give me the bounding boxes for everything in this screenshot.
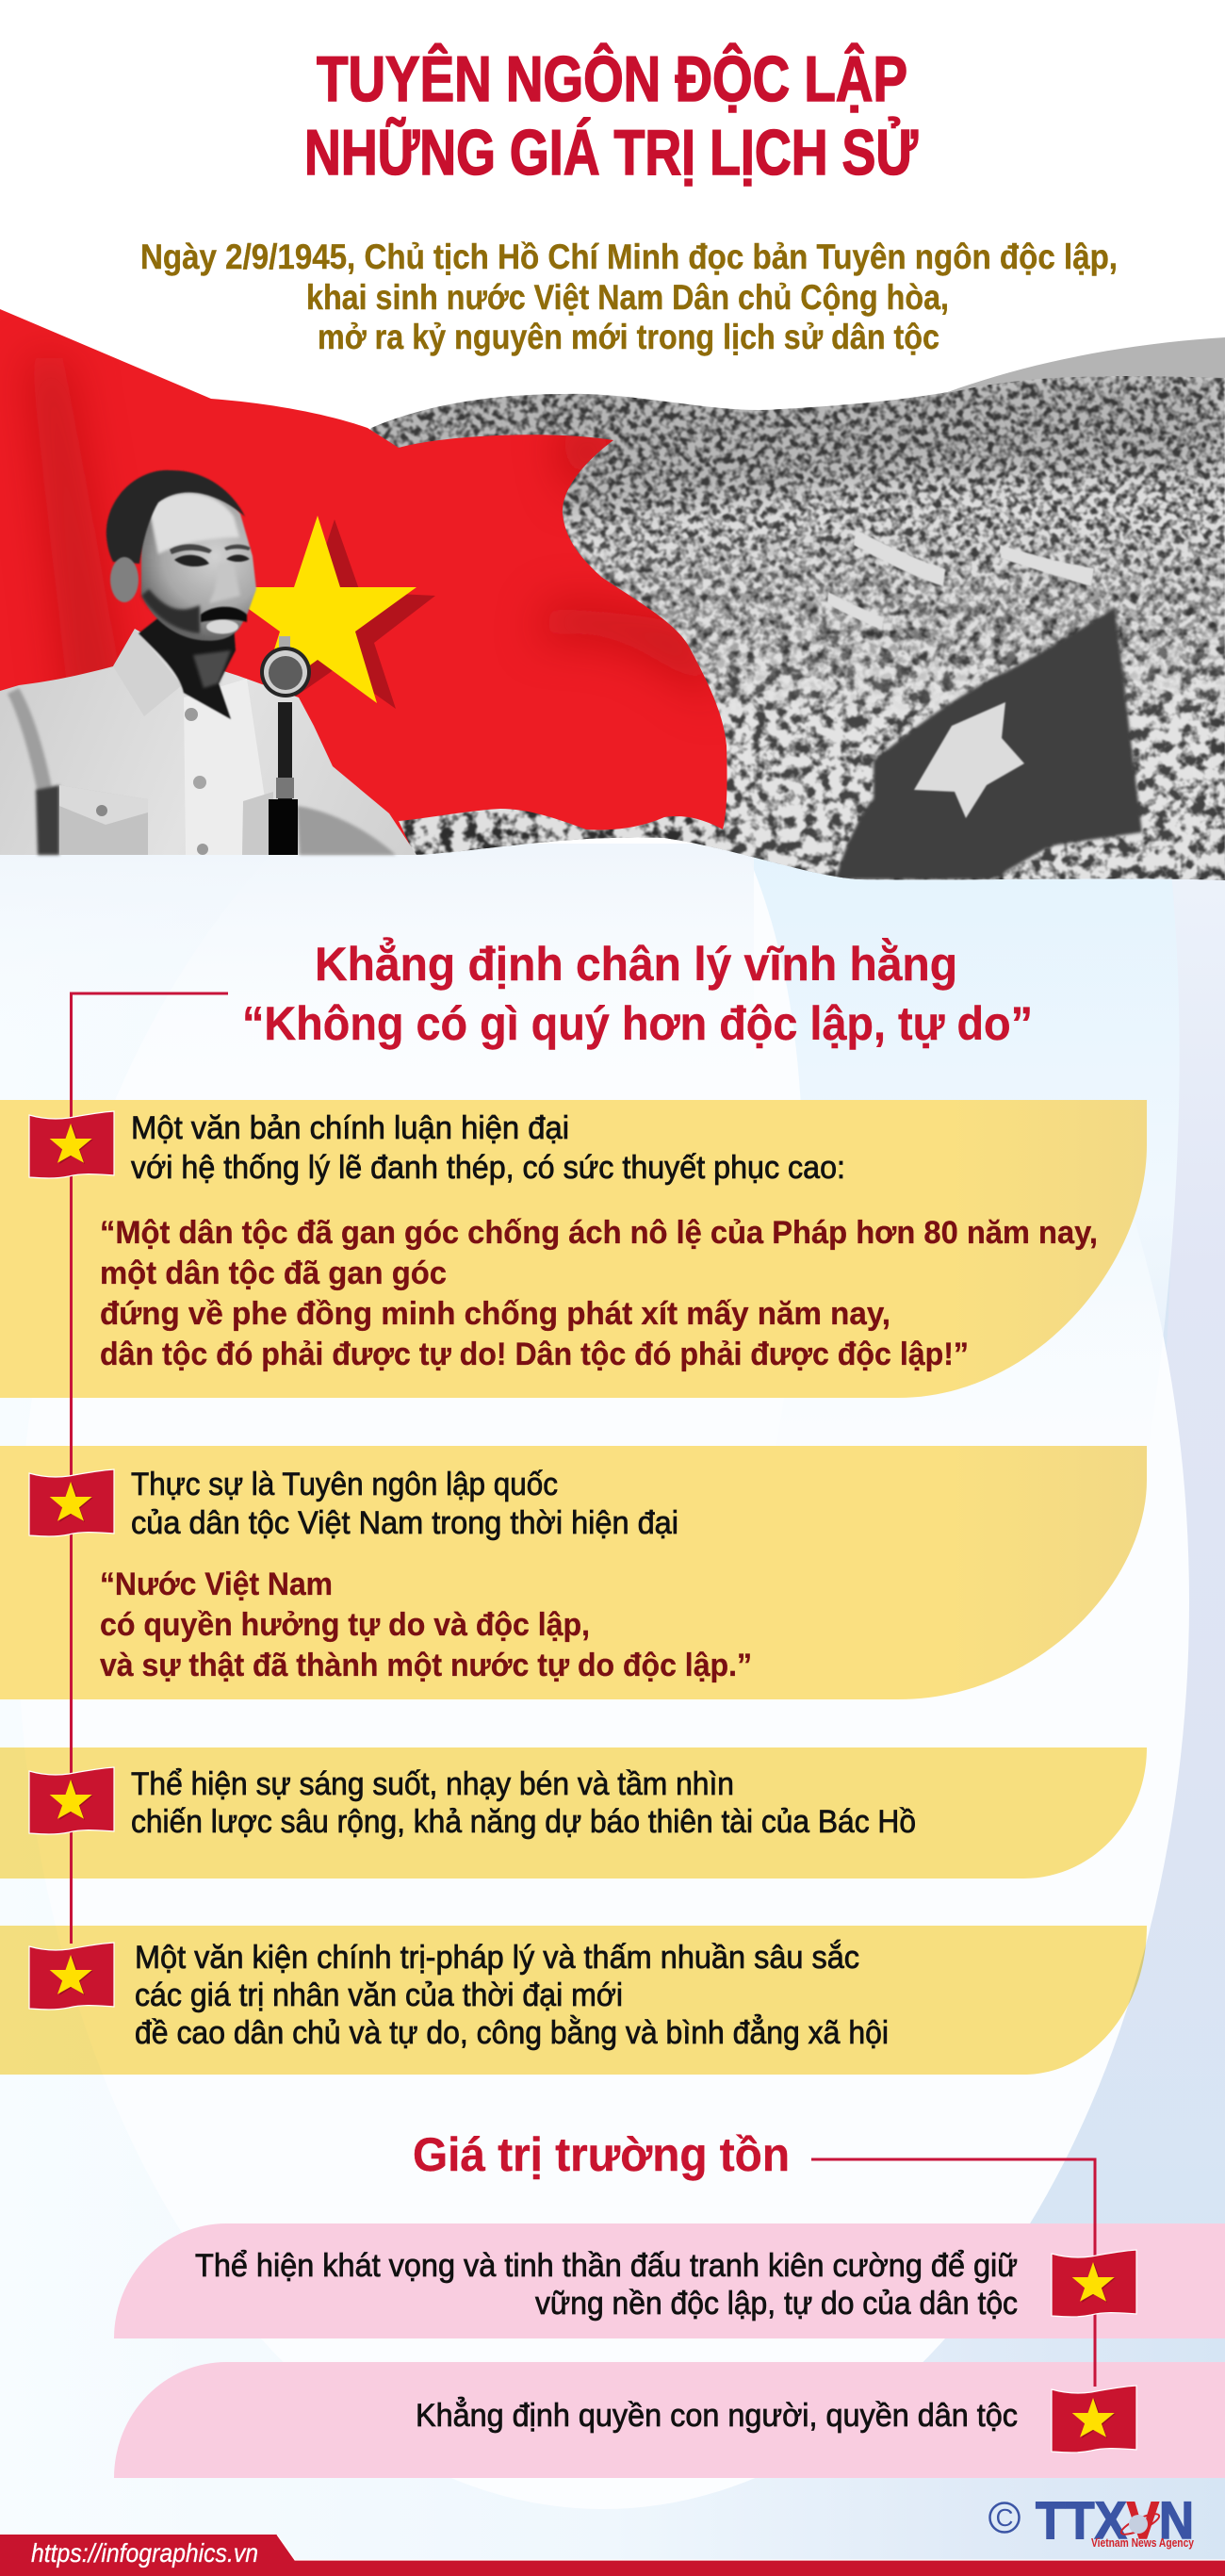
footer bar <box>0 2535 1225 2576</box>
hair <box>106 470 245 564</box>
icon: flag 2 <box>29 1469 114 1536</box>
red flag <box>0 309 727 855</box>
heading: khẳng định chân lý <box>242 937 1033 1050</box>
subtitle: mở ra kỷ nguyên mới trong lịch sử dân tộc <box>318 318 939 356</box>
collar <box>113 629 182 716</box>
panel: văn bản chính luận: một dân tộc đã gan góc <box>100 1255 447 1291</box>
panel: khát vọng đấu tranh <box>114 2223 1225 2338</box>
timeline line: left <box>72 993 228 1944</box>
panel: văn bản chính luận: Một văn bản chính luận hiện đại <box>131 1110 569 1146</box>
icon: flag 1 <box>29 1111 114 1178</box>
panel: văn kiện chính trị-pháp lý: các giá trị nhân văn của thời đại mới <box>135 1977 623 2013</box>
panel: tuyên ngôn lập quốc: và sự thật đã thành một nước tự do độc lập.” <box>100 1648 752 1683</box>
beard and neck shadow <box>139 613 236 719</box>
panel: văn bản chính luận: “Một dân tộc đã gan góc chống ách nô lệ của Pháp hơn 80 năm nay, <box>100 1215 1098 1251</box>
panel: văn bản chính luận: đứng về phe đồng minh chống phát xít mấy năm nay, <box>100 1296 890 1332</box>
logo: TTXVN: TTXVN <box>1036 2490 1194 2550</box>
nose and moustache <box>209 563 240 603</box>
panel: tầm nhìn chiến lược <box>0 1747 1147 1879</box>
jacket <box>0 629 416 855</box>
panel: tuyên ngôn lập quốc: có quyền hưởng tự do và độc lập, <box>100 1607 590 1643</box>
subtitle <box>140 238 1118 356</box>
heading: khẳng định chân lý: “Không có gì quý hơn độc lập, tự do” <box>242 997 1033 1050</box>
panel: khát vọng đấu tranh: Thể hiện khát vọng và tinh thần đấu tranh kiên cường để giữ <box>195 2248 1018 2284</box>
panel: văn bản chính luận: với hệ thống lý lẽ đanh thép, có sức thuyết phục cao: <box>131 1150 845 1186</box>
panel: tuyên ngôn lập quốc: của dân tộc Việt Nam trong thời hiện đại <box>131 1505 678 1541</box>
flag star shadow <box>294 519 435 709</box>
panel: tuyên ngôn lập quốc: “Nước Việt Nam <box>100 1567 333 1602</box>
crowd photograph <box>369 376 1225 880</box>
panel: tuyên ngôn lập quốc <box>0 1446 1147 1699</box>
panel: văn bản chính luận <box>0 1100 1147 1398</box>
heading: khẳng định chân lý: Khẳng định chân lý vĩnh hằng <box>315 937 957 991</box>
footer bar: https://infographics.vn <box>31 2538 258 2568</box>
portrait: Chủ tịch Hồ Chí Minh at microphone <box>0 470 416 855</box>
face <box>141 487 256 641</box>
logo: TTXVN: Vietnam News Agency <box>1091 2535 1195 2550</box>
panel: văn kiện chính trị-pháp lý <box>0 1926 1147 2075</box>
title: TUYÊN NGÔN ĐỘC LẬP <box>317 42 907 115</box>
panel: tầm nhìn chiến lược: chiến lược sâu rộng, khả năng dự báo thiên tài của Bác Hồ <box>131 1804 916 1840</box>
page background <box>0 696 1225 2576</box>
flag star <box>249 516 416 703</box>
eyes <box>170 544 251 566</box>
panel: văn kiện chính trị-pháp lý: Một văn kiện chính trị-pháp lý và thấm nhuần sâu sắc <box>135 1940 859 1976</box>
subtitle: Ngày 2/9/1945, Chủ tịch Hồ Chí Minh đọc bản Tuyên ngôn độc lập, <box>140 238 1118 276</box>
heading: giá trị trường tồn: Giá trị trường tồn <box>413 2128 790 2181</box>
panel: quyền con người: Khẳng định quyền con người, quyền dân tộc <box>416 2398 1018 2434</box>
flag waved in crowd <box>836 608 1142 879</box>
panel: văn kiện chính trị-pháp lý: đề cao dân chủ và tự do, công bằng và bình đẳng xã hội <box>135 2015 889 2051</box>
title <box>304 42 918 189</box>
icon: flag 3 <box>29 1767 114 1834</box>
title: NHỮNG GIÁ TRỊ LỊCH SỬ <box>304 116 918 189</box>
subtitle: khai sinh nước Việt Nam Dân chủ Cộng hòa, <box>306 278 949 317</box>
logo: TTXVN: C <box>996 2503 1013 2532</box>
panel: tuyên ngôn lập quốc: Thực sự là Tuyên ngôn lập quốc <box>131 1467 558 1502</box>
ear <box>110 557 139 602</box>
grey band behind crowd <box>942 337 1225 394</box>
panel: khát vọng đấu tranh: vững nền độc lập, tự do của dân tộc <box>535 2286 1018 2322</box>
mouth <box>206 620 238 633</box>
panel: văn bản chính luận: dân tộc đó phải được tự do! Dân tộc đó phải được độc lập!” <box>100 1337 969 1372</box>
microphone <box>260 636 311 855</box>
icon: flag 6 <box>1052 2386 1136 2453</box>
white banners in crowd <box>827 530 1094 630</box>
panel: quyền con người <box>114 2362 1225 2478</box>
timeline line: right <box>811 2159 1095 2387</box>
icon: flag 5 <box>1052 2250 1136 2317</box>
icon: flag 4 <box>29 1943 114 2010</box>
panel: tầm nhìn chiến lược: Thể hiện sự sáng suốt, nhạy bén và tầm nhìn <box>131 1766 734 1802</box>
